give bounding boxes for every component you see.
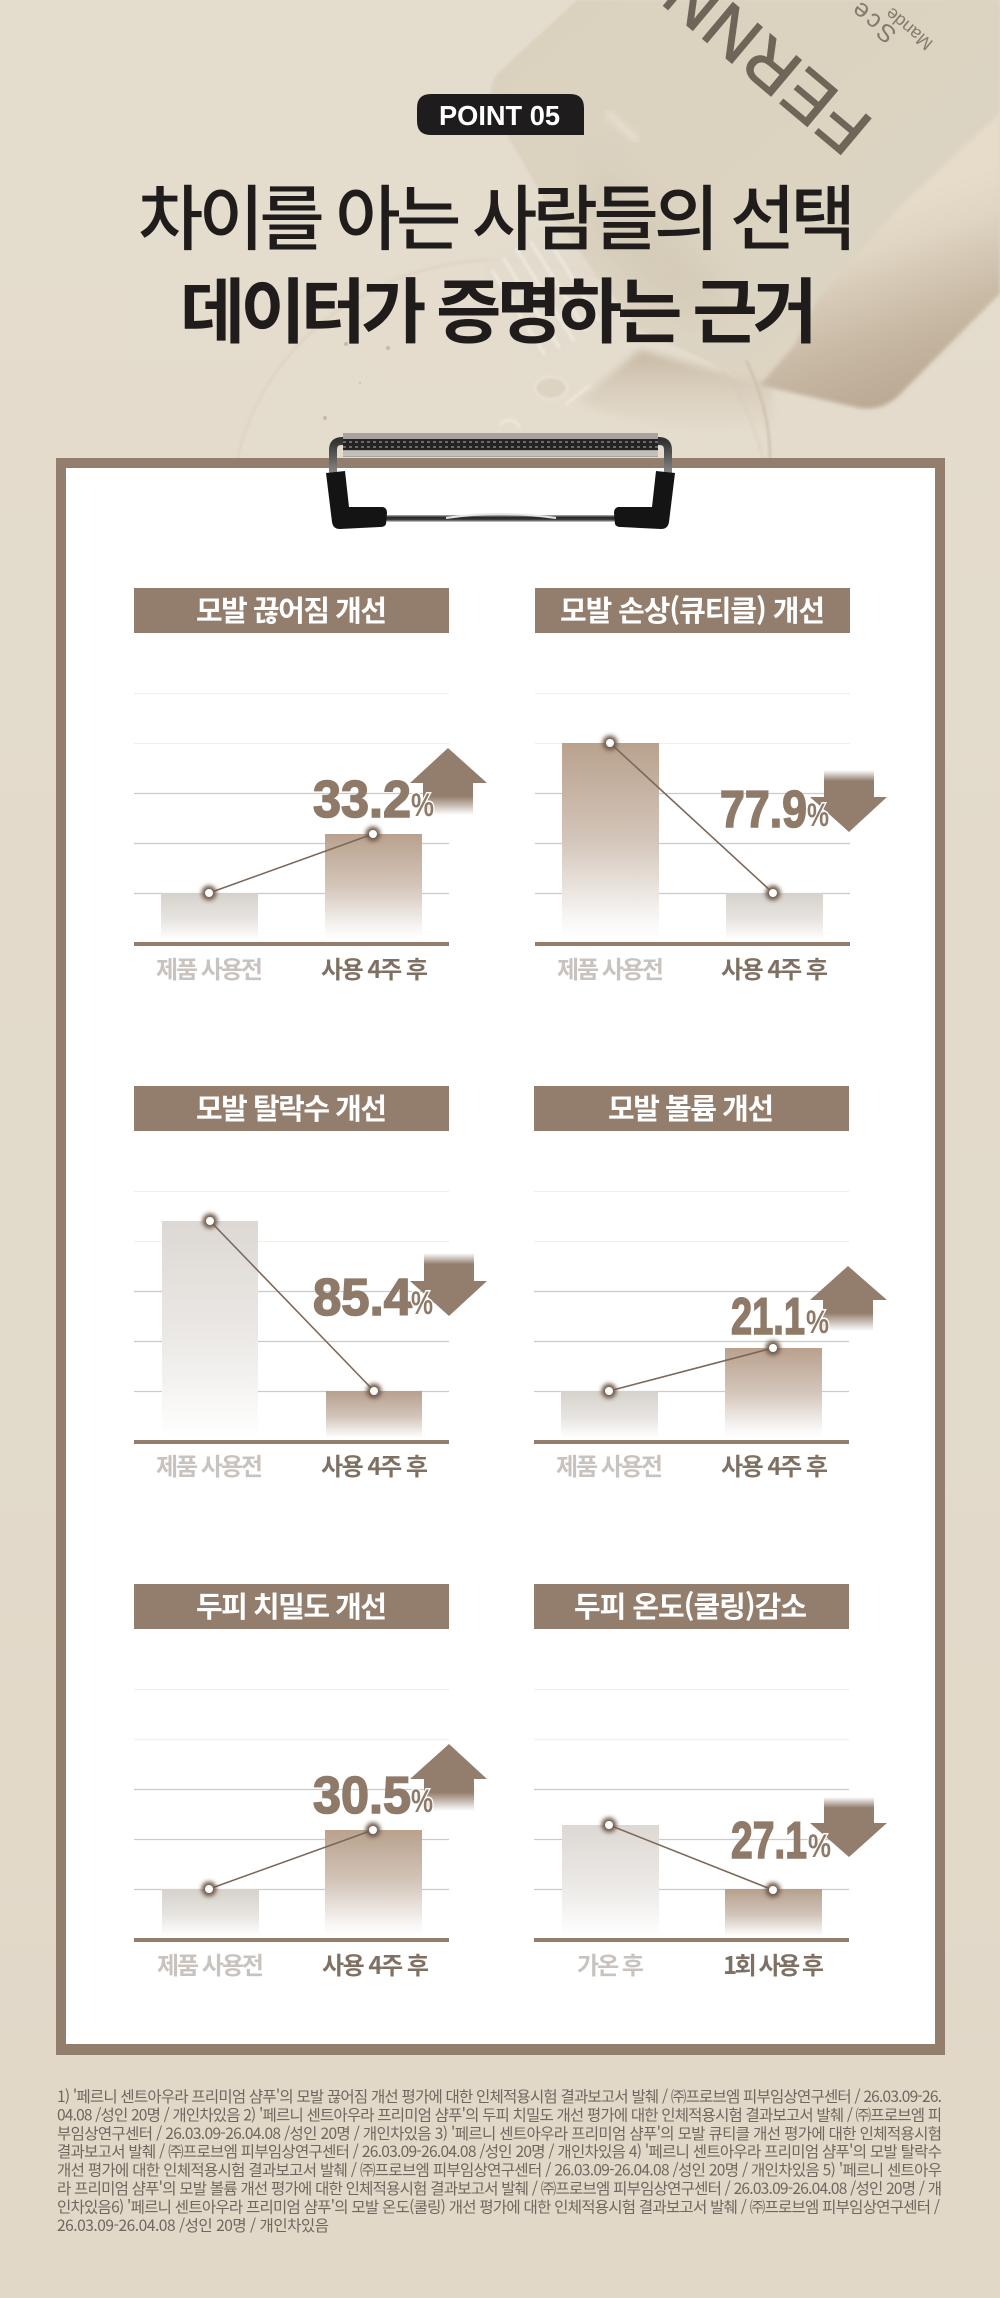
- title: 차이를 아는 사람들의 선택: [138, 163, 856, 265]
- heading: [134, 1584, 449, 1629]
- bars: [161, 834, 422, 940]
- heading: [534, 1584, 849, 1629]
- footnote: 부임상연구센터 / 26.03.09-26.04.08 /성인 20명 / 개인차있음 3) '페르니 센트아우라 프리미엄 샴푸'의 모발 큐티클 개선 평가에 대한 인체적용시험: [57, 2122, 942, 2144]
- trend line: [202, 826, 380, 900]
- value: 30.5%: %: [411, 1783, 433, 1819]
- bars: [162, 1830, 422, 1936]
- chart: hair volume improvement: [534, 1086, 887, 1482]
- chart: scalp density improvement: [134, 1584, 487, 1981]
- heading: 두피 온도(쿨링)감소: [574, 1584, 807, 1626]
- value: 30.5%: 30.5: [313, 1767, 411, 1825]
- axis labels: 1회 사용 후: [723, 1946, 824, 1981]
- trend line: [602, 1818, 780, 1898]
- value: 21.1%: 21.1: [731, 1288, 805, 1346]
- footnote: [57, 2085, 942, 2236]
- axis labels: 제품 사용전: [156, 950, 263, 985]
- value: 33.2%: %: [411, 787, 434, 823]
- chart: hair breakage improvement: [134, 588, 487, 985]
- footnote: 개선 평가에 대한 인체적용시험 결과보고서 발췌 / ㈜프로브엠 피부임상연구센터 / 26.03.09-26.04.08 /성인 20명 / 개인차있음 5) '페르니 센트아우: [57, 2159, 942, 2181]
- footnote: 라 프리미엄 샴푸'의 모발 볼륨 개선 평가에 대한 인체적용시험 결과보고서 발췌 / ㈜프로브엠 피부임상연구센터 / 26.03.09-26.04.08 /성인 20명 / 개: [57, 2177, 942, 2199]
- value: 85.4%: %: [411, 1285, 433, 1321]
- axis labels: [156, 950, 428, 985]
- value: 85.4%: 85.4: [313, 1269, 412, 1327]
- trend line: [202, 1822, 380, 1896]
- heading: 모발 볼륨 개선: [608, 1086, 774, 1128]
- arrow: up: [410, 748, 487, 815]
- value: 21.1%: %: [806, 1304, 829, 1340]
- heading: 모발 손상(큐티클) 개선: [560, 588, 825, 630]
- bars: [562, 1825, 822, 1936]
- axis labels: 사용 4주 후: [321, 950, 428, 985]
- axis labels: 사용 4주 후: [322, 1946, 429, 1981]
- chart: scalp temperature cooling decrease: [534, 1584, 887, 1981]
- heading: 모발 탈락수 개선: [196, 1086, 387, 1128]
- heading: [534, 1086, 849, 1131]
- value: 77.9%: %: [807, 797, 829, 833]
- title: 데이터가 증명하는 근거: [180, 256, 818, 358]
- axis labels: 제품 사용전: [157, 1946, 264, 1981]
- footnote: 04.08 /성인 20명 / 개인차있음 2) '페르니 센트아우라 프리미엄 샴푸'의 두피 치밀도 개선 평가에 대한 인체적용시험 결과보고서 발췌 / ㈜프로브엠 피: [57, 2103, 942, 2125]
- axis labels: [556, 1447, 828, 1482]
- axis labels: 사용 4주 후: [721, 1447, 828, 1482]
- axis labels: 사용 4주 후: [321, 1447, 428, 1482]
- value: 27.1%: %: [808, 1828, 831, 1864]
- bars: [562, 743, 823, 940]
- axis labels: 제품 사용전: [556, 1447, 663, 1482]
- axis labels: [557, 950, 828, 985]
- axis labels: 제품 사용전: [557, 950, 664, 985]
- trend line: [202, 1214, 382, 1398]
- arrow: down: [810, 770, 887, 832]
- heading: [134, 1086, 449, 1131]
- bars: [162, 1221, 422, 1438]
- axis labels: 사용 4주 후: [721, 950, 828, 985]
- footnote: 1) '페르니 센트아우라 프리미엄 샴푸'의 모발 끊어짐 개선 평가에 대한 인체적용시험 결과보고서 발췌 / ㈜프로브엠 피부임상연구센터 / 26.03.09-26.: [57, 2085, 942, 2107]
- footnote: 결과보고서 발췌 / ㈜프로브엠 피부임상연구센터 / 26.03.09-26.04.08 /성인 20명 / 개인차있음 4) '페르니 센트아우라 프리미엄 샴푸'의 모발 탈락수: [57, 2140, 942, 2162]
- arrow: down: [410, 1253, 487, 1316]
- axis labels: [577, 1946, 824, 1981]
- trend line: [602, 1340, 780, 1398]
- chart: hair cuticle damage improvement: [535, 588, 887, 985]
- trend line: [602, 736, 780, 900]
- axis labels: 제품 사용전: [156, 1447, 263, 1482]
- arrow: down: [810, 1797, 887, 1857]
- arrow: up: [410, 1744, 487, 1811]
- chart: hair shedding improvement: [134, 1086, 487, 1482]
- heading: 모발 끊어짐 개선: [196, 588, 387, 630]
- footnote: 인차있음6) '페르니 센트아우라 프리미엄 샴푸'의 모발 온도(쿨링) 개선 평가에 대한 인체적용시험 결과보고서 발췌 / ㈜프로브엠 피부임상연구센터 /: [57, 2195, 940, 2217]
- background photo: product bottle pouring liquid: Mande: [882, 4, 937, 54]
- value: 27.1%: 27.1: [731, 1812, 807, 1870]
- panel: clipboard board: [56, 458, 945, 2055]
- bars: [561, 1348, 822, 1438]
- heading: [134, 588, 449, 633]
- footnote: 26.03.09-26.04.08 /성인 20명 / 개인차있음: [57, 2214, 329, 2236]
- title: [138, 163, 856, 358]
- badge: POINT 05: [417, 94, 584, 135]
- arrow: up: [810, 1266, 887, 1331]
- value: 77.9%: 77.9: [720, 781, 807, 839]
- heading: 두피 치밀도 개선: [196, 1584, 387, 1626]
- axis labels: [156, 1447, 428, 1482]
- badge: POINT 05: POINT 05: [439, 100, 560, 131]
- axis labels: 가온 후: [577, 1946, 644, 1981]
- axis labels: [157, 1946, 429, 1981]
- value: 33.2%: 33.2: [313, 771, 411, 829]
- icon: clipboard clip: [326, 433, 675, 529]
